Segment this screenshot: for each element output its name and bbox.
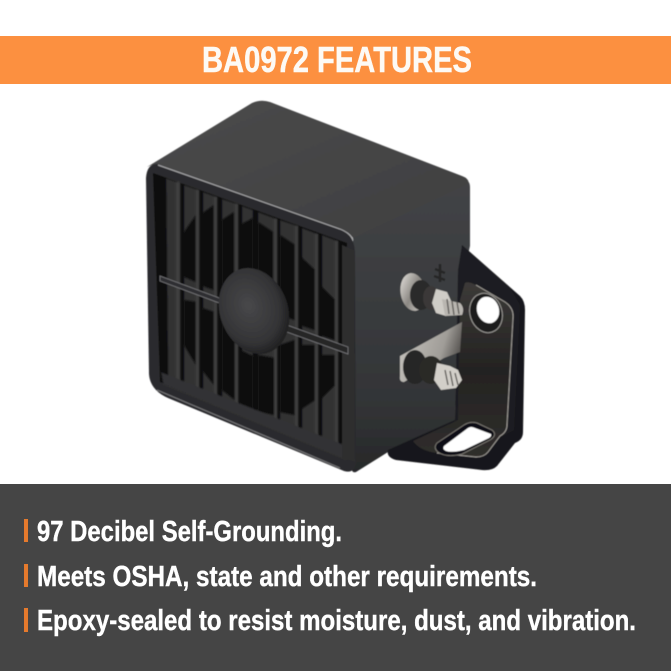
phillips mark xyxy=(434,264,445,282)
right grille wall xyxy=(342,245,355,462)
mounting bracket xyxy=(388,245,525,470)
horizontal rib left xyxy=(160,276,222,304)
grille slats xyxy=(166,178,338,452)
mounting hole xyxy=(465,289,507,337)
slot hole xyxy=(435,422,495,456)
grille bottom lip xyxy=(161,372,347,460)
lower terminal screw xyxy=(403,350,462,390)
product photo: backup alarm xyxy=(146,101,525,472)
fan blades behind grille xyxy=(182,205,335,415)
title banner xyxy=(0,36,671,84)
terminal plate xyxy=(400,322,462,382)
housing side face xyxy=(352,181,470,472)
feature panel xyxy=(0,484,671,671)
feature 1: 97 Decibel Self-Grounding. xyxy=(37,516,342,548)
feature 2: Meets OSHA, state and other requirements. xyxy=(37,561,537,593)
grille ribs highlights xyxy=(176,182,338,452)
title text: BA0972 FEATURES xyxy=(202,39,472,80)
upper terminal screw xyxy=(398,271,463,316)
grille xyxy=(153,173,355,462)
bracket steel edge xyxy=(437,285,513,457)
housing top face xyxy=(147,101,468,238)
horizontal rib right xyxy=(284,324,348,354)
housing front frame xyxy=(146,164,356,472)
center knob xyxy=(207,258,301,364)
